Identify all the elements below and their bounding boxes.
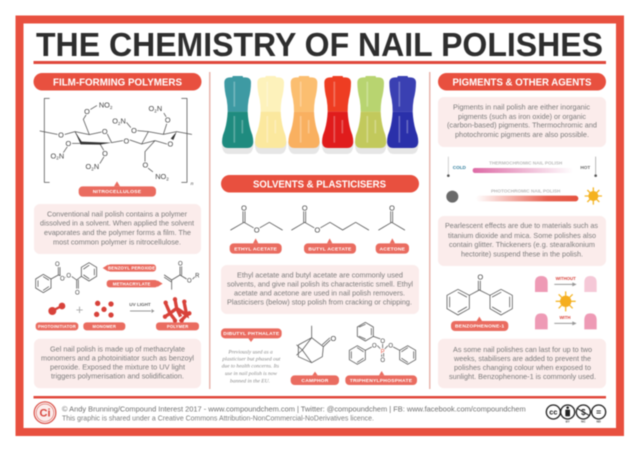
- chart: nitrocellulose structure: O: [86, 162, 91, 171]
- text block: gel polish: [34, 339, 201, 388]
- callout: dibutyl phthalate: use in nail polish is now: [225, 371, 278, 377]
- chart: nitrocellulose structure: O: [112, 117, 118, 126]
- text block: gel polish: Gel nail polish is made up of methacrylate: [50, 344, 185, 353]
- text block: stabilisers: [438, 339, 606, 388]
- text block: gel polish: peroxide. Exposed the mixture to UV light: [50, 362, 185, 372]
- callout: dibutyl phthalate: Previously used as a: [227, 349, 273, 355]
- arrow: UV light: UV LIGHT: [129, 302, 151, 307]
- chart: nitrocellulose structure: 2: [91, 166, 94, 171]
- label: acetone: [376, 238, 409, 254]
- chart: nitrocellulose structure: N: [120, 117, 126, 126]
- molecule: benzophenone-1: [447, 273, 512, 315]
- molecule: camphor: [297, 326, 336, 363]
- footer text: © Andy Brunning/Compound Interest 2017 - www.compoundchem.com | Twitter: @compoundchem | FB: www.facebook.com/compoundchem: [62, 404, 526, 413]
- icons: creative commons licence: ND: [597, 420, 602, 424]
- chart: photochromic bar: [446, 189, 578, 203]
- molecule: triphenyl phosphate: O: [380, 358, 385, 364]
- chart: thermochromic bar: COLD: [453, 165, 467, 170]
- chart: nitrocellulose structure: 2: [118, 121, 121, 126]
- chart: thermochromic bar: [447, 157, 597, 177]
- chart: nitrocellulose structure: O: [165, 116, 171, 125]
- chart: nitrocellulose structure: O: [102, 149, 108, 158]
- label: benzophenone-1: [451, 317, 508, 331]
- molecule: triphenyl phosphate: O: [372, 344, 377, 350]
- molecule: methacrylate: O: [178, 261, 183, 267]
- label: camphor: [291, 372, 339, 385]
- molecule: benzoyl peroxide: [36, 262, 97, 296]
- molecules: ethyl acetate, butyl acetate, acetone: O: [389, 203, 395, 212]
- column divider right: [429, 72, 430, 389]
- molecule: methacrylate: O: [187, 279, 192, 285]
- molecules: ethyl acetate, butyl acetate, acetone: O: [302, 203, 308, 212]
- label: butyl acetate: [304, 238, 356, 254]
- text block: pigments: (carbon-based) pigments. Thermochromic and: [447, 120, 597, 130]
- chart: nitrocellulose structure: O: [123, 136, 129, 145]
- bottle: cream: [255, 76, 287, 154]
- bottle: green: [355, 76, 387, 154]
- text block: pearlescent: hectorite) suspend these in the polish.: [461, 250, 583, 258]
- diagram: nail stabiliser effect: [535, 276, 597, 329]
- label: photoinitiator: PHOTOINITIATOR: [38, 324, 76, 329]
- label: methacrylate: [107, 280, 163, 287]
- text block: pigments: pigments (such as iron oxide) or organic: [458, 112, 586, 121]
- icons: creative commons licence: cc: [549, 408, 557, 417]
- text block: pearlescent: contain glitter. Thickeners (e.g. stearalkonium: [449, 240, 595, 249]
- text block: solvents: [221, 265, 419, 314]
- label: ethyl acetate: [230, 238, 282, 254]
- icon: monomer: [94, 301, 114, 318]
- chart: photochromic bar: PHOTOCHROMIC NAIL POLISH: [491, 189, 561, 194]
- diagram: nail stabiliser effect: WITHOUT: [556, 276, 576, 281]
- label: benzoyl peroxide: [103, 264, 156, 272]
- icons: creative commons licence: NC: [581, 420, 586, 424]
- icon: polymer: [163, 297, 191, 323]
- text block: pearlescent: [438, 216, 606, 266]
- label: benzoyl peroxide: BENZOYL PEROXIDE: [108, 266, 155, 271]
- text block: conventional polish: most common polymer is nitrocellulose.: [53, 238, 181, 246]
- label: methacrylate: METHACRYLATE: [113, 281, 151, 286]
- column divider left: [209, 72, 210, 389]
- image: nail polish bottles: [222, 76, 419, 154]
- text block: solvents: Plasticisers (below) stop polish from cracking or chipping.: [227, 298, 412, 306]
- title underline: [34, 61, 606, 64]
- label: acetone: ACETONE: [379, 246, 406, 252]
- label: benzophenone-1: BENZOPHENONE-1: [455, 324, 504, 330]
- chart: nitrocellulose structure: [40, 98, 194, 187]
- label: triphenyl phosphate: [345, 371, 417, 385]
- text block: pigments: Pigments in nail polish are either inorganic: [453, 102, 590, 112]
- heading: solvents and plasticisers: SOLVENTS & PLASTICISERS: [253, 178, 386, 190]
- chart: nitrocellulose structure: 2: [154, 108, 157, 113]
- molecule: camphor: O: [330, 334, 336, 343]
- molecule: benzoyl peroxide: O: [66, 273, 71, 279]
- chart: nitrocellulose structure: NO: [99, 101, 110, 110]
- diagram: nail stabiliser effect: WITH: [559, 315, 571, 320]
- footer text: [62, 404, 526, 422]
- callout: dibutyl phthalate: banned in the EU.: [230, 378, 270, 384]
- callout: dibutyl phthalate: plasticiser but phased out: [221, 356, 281, 362]
- bottle: teal: [222, 76, 254, 154]
- chart: nitrocellulose structure: n: [191, 181, 194, 187]
- molecules: ethyl acetate, butyl acetate, acetone: O: [241, 203, 247, 212]
- chart: nitrocellulose structure: O: [131, 126, 137, 135]
- icons: creative commons licence: [546, 405, 606, 424]
- chart: nitrocellulose structure: O: [51, 151, 56, 160]
- bottle: red: [322, 76, 354, 154]
- chart: nitrocellulose structure: O: [149, 104, 154, 113]
- molecule: triphenyl phosphate: O: [380, 339, 385, 345]
- callout: dibutyl phthalate: DIBUTYL PHTHALATE: [223, 331, 280, 337]
- icons: creative commons licence: =: [596, 407, 601, 417]
- molecule: benzoyl peroxide: O: [75, 290, 80, 296]
- chart: thermochromic bar: THERMOCHROMIC NAIL POLISH: [489, 160, 563, 165]
- molecules: ethyl acetate, butyl acetate, acetone: [231, 203, 405, 235]
- heading: film-forming polymers: [34, 73, 202, 90]
- text block: stabilisers: As some nail polishes can last for up to two: [453, 345, 592, 354]
- footer text: This graphic is shared under a Creative Commons Attribution-NonCommercial-NoDerivatives licence.: [62, 413, 374, 422]
- icon: sun: [585, 187, 602, 205]
- text block: stabilisers: polishes changing colour when exposed to: [454, 363, 591, 372]
- text block: conventional polish: Conventional nail polish contains a polymer: [47, 210, 188, 218]
- text block: gel polish: monomers and a photoinitiator such as benzoyl: [41, 354, 194, 362]
- molecule: methacrylate: [164, 261, 200, 289]
- chart: nitrocellulose structure: O: [142, 161, 148, 170]
- text block: pigments: photochromic pigments are also possible.: [455, 130, 589, 139]
- logo: compound interest: [34, 402, 56, 424]
- chart: nitrocellulose structure: 2: [110, 105, 113, 110]
- label: butyl acetate: BUTYL ACETATE: [308, 246, 352, 252]
- logo: compound interest: Ci: [40, 408, 50, 420]
- molecule: triphenyl phosphate: P: [381, 349, 385, 355]
- text block: pigments: [438, 97, 606, 147]
- title: THE CHEMISTRY OF NAIL POLISHES: [36, 27, 603, 64]
- molecule: benzoyl peroxide: O: [60, 277, 65, 283]
- text block: solvents: solvents, and give nail polish its characteristic smell. Ethyl: [227, 280, 413, 288]
- text block: gel polish: triggers polymerisation and solidification.: [51, 372, 184, 381]
- bottle: orange: [288, 76, 320, 154]
- arrow: UV light: [129, 302, 154, 313]
- text block: conventional polish: dissolved in a solvent. When applied the solvent: [40, 218, 194, 228]
- text block: solvents: acetate and acetone are used in nail polish removers.: [234, 288, 405, 298]
- chart: nitrocellulose structure: NO: [155, 172, 166, 181]
- heading: film-forming polymers: FILM-FORMING POLYMERS: [53, 76, 182, 88]
- text block: pearlescent: Pearlescent effects are due to materials such as: [445, 221, 598, 230]
- label: polymer: POLYMER: [167, 324, 188, 329]
- chart: nitrocellulose structure: O: [102, 127, 108, 136]
- icons: creative commons licence: BY: [566, 420, 570, 424]
- chart: nitrocellulose structure: O: [167, 139, 173, 148]
- label: monomer: [83, 322, 125, 330]
- plus sign: +: [76, 302, 83, 317]
- icons: creative commons licence: $: [581, 408, 586, 417]
- molecule: triphenyl phosphate: [349, 322, 416, 364]
- text block: stabilisers: weeks, stabilisers are added to prevent the: [453, 354, 591, 363]
- chart: nitrocellulose structure: N: [59, 151, 64, 160]
- label: photoinitiator: [36, 322, 78, 330]
- label: monomer: MONOMER: [93, 324, 116, 329]
- footer rule: [34, 396, 606, 398]
- chart: nitrocellulose structure: 2: [56, 156, 59, 161]
- icon: photoinitiator: [48, 303, 65, 315]
- label: ethyl acetate: ETHYL ACETATE: [234, 246, 278, 252]
- text block: conventional polish: evaporates and the polymer forms a film. The: [44, 228, 191, 237]
- label: nitrocellulose: [79, 181, 156, 197]
- label: polymer: [156, 322, 199, 330]
- text block: conventional polish: [34, 204, 201, 254]
- label: camphor: CAMPHOR: [301, 378, 329, 384]
- molecule: benzoyl peroxide: O: [55, 262, 60, 268]
- chart: thermochromic bar: HOT: [580, 165, 590, 170]
- text block: pearlescent: titanium dioxide and mica. Some polishes also: [448, 231, 596, 240]
- molecules: ethyl acetate, butyl acetate, acetone: O: [314, 226, 320, 235]
- molecule: benzophenone-1: O: [477, 273, 483, 282]
- heading: solvents and plasticisers: [221, 175, 419, 192]
- label: triphenyl phosphate: TRIPHENYLPHOSPHATE: [350, 378, 413, 384]
- heading: pigments and other agents: [438, 73, 606, 90]
- molecule: methacrylate: R: [195, 273, 200, 279]
- heading: pigments and other agents: PIGMENTS & OTHER AGENTS: [452, 76, 592, 88]
- label: nitrocellulose: NITROCELLULOSE: [93, 189, 142, 195]
- text block: stabilisers: sunlight. Benzophenone-1 is commonly used.: [449, 372, 596, 381]
- callout: dibutyl phthalate: [221, 328, 282, 384]
- chart: nitrocellulose structure: N: [94, 162, 99, 171]
- chart: nitrocellulose structure: N: [157, 104, 162, 113]
- bottle: blue: [387, 76, 419, 154]
- chart: nitrocellulose structure: O: [65, 139, 71, 148]
- chart: nitrocellulose structure: 2: [166, 176, 169, 181]
- molecule: triphenyl phosphate: O: [388, 344, 393, 350]
- text block: solvents: Ethyl acetate and butyl acetate are commonly used: [237, 270, 403, 280]
- callout: dibutyl phthalate: due to health concerns. Its: [222, 364, 279, 370]
- chart: nitrocellulose structure: O: [58, 131, 64, 140]
- chart: nitrocellulose structure: O: [84, 107, 90, 116]
- molecules: ethyl acetate, butyl acetate, acetone: O: [254, 226, 260, 235]
